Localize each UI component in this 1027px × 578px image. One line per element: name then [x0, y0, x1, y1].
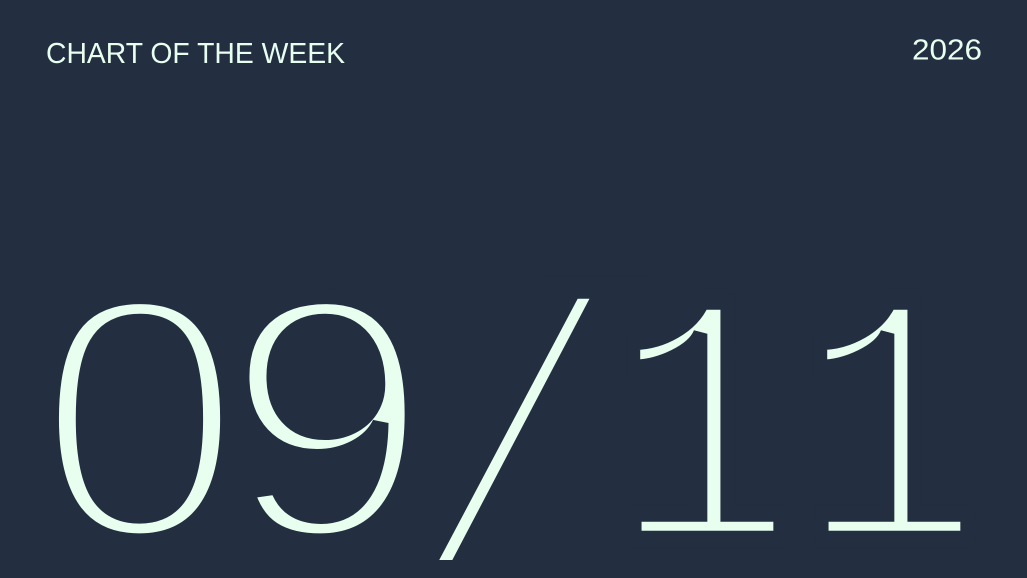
heading: CHART OF THE WEEK: [46, 38, 345, 70]
date: 09/11: [36, 217, 982, 578]
year: 2026: [912, 34, 982, 66]
